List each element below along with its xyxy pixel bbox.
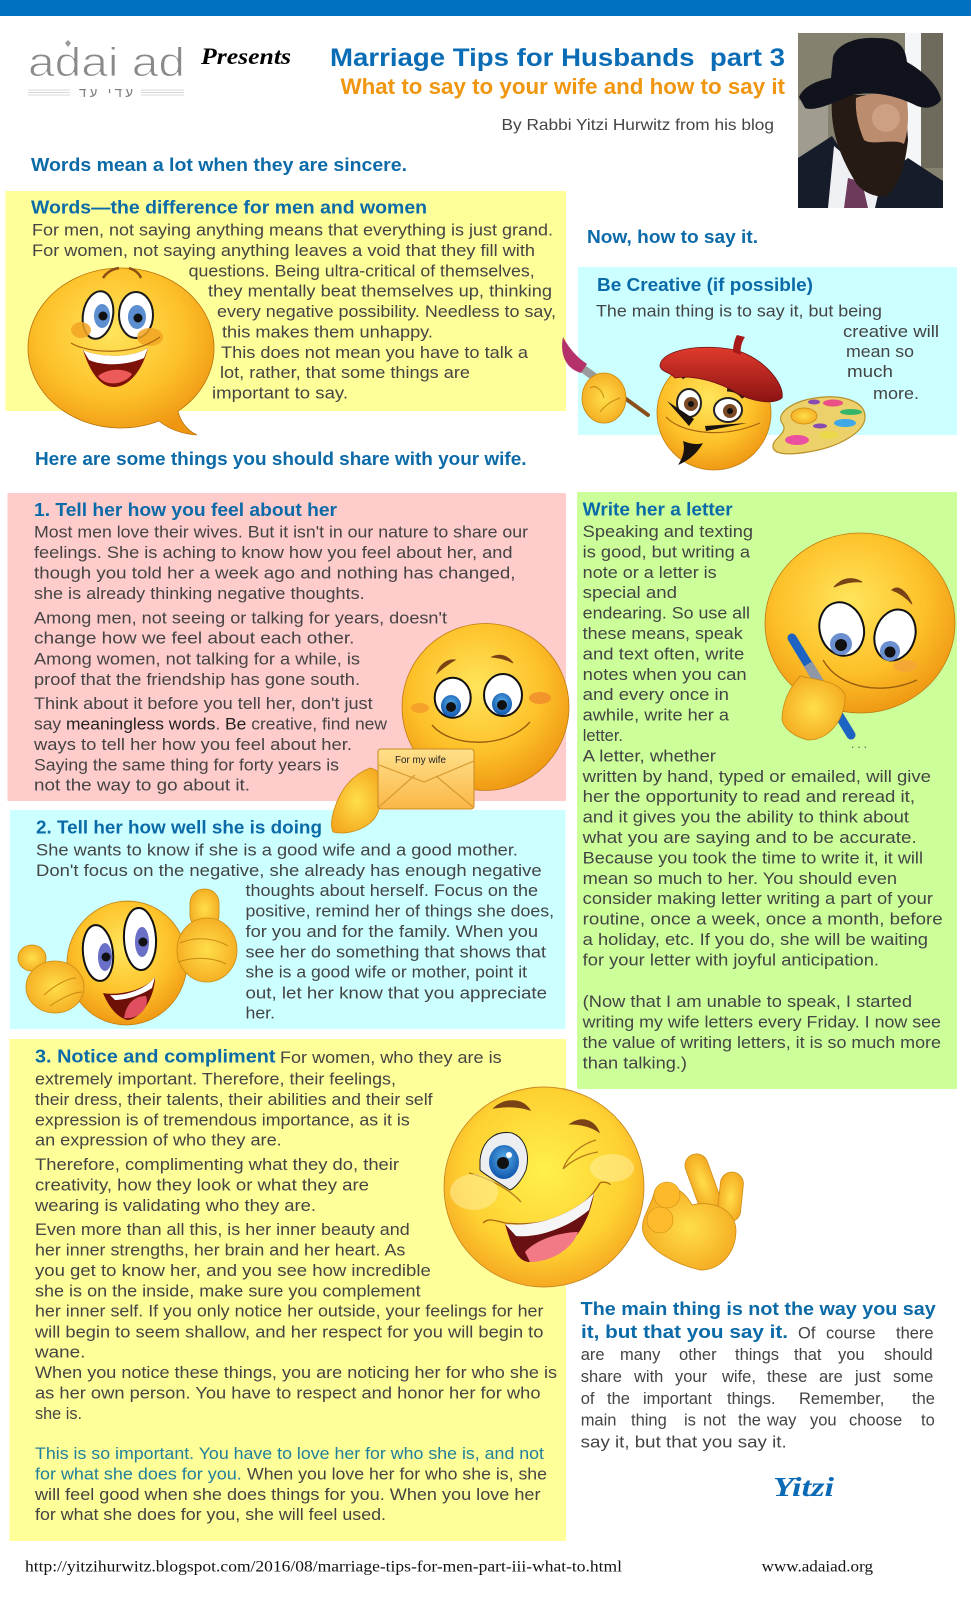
closing note: way: [766, 1412, 797, 1430]
closing note: it, but that you say it.: [581, 1322, 788, 1342]
panel text: Saying the same thing for forty years is: [34, 756, 339, 774]
logo: adai ad: adai ad: [28, 39, 185, 85]
panel text: than talking.): [583, 1054, 687, 1072]
closing note: is: [684, 1412, 696, 1430]
envelope: For my wife: For my wife: [395, 755, 446, 766]
panel text: thoughts about herself. Focus on the: [246, 882, 538, 900]
closing note: to: [921, 1412, 935, 1430]
closing note: not: [703, 1412, 726, 1430]
panel text: When you love her for who she is, she: [247, 1465, 547, 1483]
panel text: (Now that I am unable to speak, I started: [583, 993, 912, 1011]
panel text: every negative possibility. Needless to say,: [217, 303, 556, 321]
closing note: many: [620, 1346, 661, 1364]
panel text: positive, remind her of things she does,: [246, 903, 554, 921]
panel text: For women, not saying anything leaves a void that they fill with: [32, 242, 535, 260]
closing note: wife,: [721, 1368, 756, 1386]
panel: tell her how you feel: [8, 493, 566, 801]
panel text: as her own person. You have to respect and honor her for who: [35, 1384, 540, 1402]
panel heading: 1. Tell her how you feel about her: [34, 500, 337, 520]
closing note: things.: [727, 1390, 776, 1408]
panel text: special and: [583, 584, 677, 602]
icon: writing smiley with pen: [765, 533, 955, 751]
panel: be creative: [578, 267, 957, 435]
panel text: mean so: [846, 343, 914, 361]
heading: things to share: Here are some things you should share with your wife.: [35, 449, 526, 469]
closing note: important: [643, 1390, 712, 1408]
closing note: these: [767, 1368, 807, 1386]
signature: Yitzi: Yitzi: [773, 1472, 835, 1502]
panel heading: Words—the difference for men and women: [31, 198, 427, 218]
beret: [660, 347, 782, 402]
panel text: For men, not saying anything means that everything is just grand.: [32, 222, 553, 240]
panel heading: 2. Tell her how well she is doing: [36, 817, 322, 837]
panel: write her a letter: [577, 492, 957, 1089]
panel text: wearing is validating who they are.: [34, 1197, 316, 1215]
panel text: extremely important. Therefore, their feelings,: [35, 1070, 396, 1088]
panel text: and it gives you the ability to think about: [583, 809, 909, 827]
panel text: A letter, whether: [583, 747, 717, 765]
panel text: say meaningless words . Be creative, find new: [34, 715, 387, 733]
panel text: Most men love their wives. But it isn't in our nature to share our: [34, 524, 529, 542]
closing note: should: [884, 1346, 933, 1364]
panel text: creative will: [843, 323, 939, 341]
closing note: The main thing is not the way you say: [581, 1299, 936, 1319]
heading: words mean: Words mean a lot when they are sincere.: [31, 155, 407, 175]
right hand: [177, 889, 237, 982]
icon: writing smiley with pen: ...: [851, 737, 870, 751]
closing note: the: [912, 1390, 935, 1408]
closing note: things: [735, 1346, 779, 1364]
panel text: This does not mean you have to talk a: [221, 344, 529, 362]
panel text: lot, rather, that some things are: [220, 364, 470, 382]
palette: [773, 397, 865, 454]
panel text: and text often, write: [583, 645, 744, 663]
panel text: for your letter with joyful anticipation.: [583, 951, 879, 969]
icon: smiley holding letter: [331, 624, 569, 833]
closing note: some: [893, 1368, 933, 1386]
panel heading: Be Creative (if possible): [597, 275, 813, 295]
panel text: her the opportunity to read and reread it,: [583, 788, 915, 806]
panel text: more.: [873, 385, 919, 403]
left hand: [18, 945, 84, 1013]
top bar: [0, 0, 971, 16]
panel text: wane.: [34, 1344, 85, 1362]
panel text: writing my wife letters every Friday. I now see: [582, 1014, 941, 1032]
panel text: though you told her a week ago and nothing has changed,: [34, 564, 516, 582]
closing note: share: [581, 1368, 622, 1386]
panel text: Think about it before you tell her, don't just: [34, 695, 373, 713]
panel text: out, let her know that you appreciate: [246, 984, 547, 1002]
panel text: change how we feel about each other.: [34, 630, 354, 648]
closing note: say it, but that you say it.: [581, 1434, 787, 1452]
panel text: routine, once a week, once a month, before: [583, 911, 943, 929]
footer website: www.adaiad.org: [762, 1559, 873, 1576]
panel text: For women, who they are is: [280, 1049, 502, 1067]
title: Marriage Tips for Husbands part 3: [330, 44, 785, 72]
icon: thumbs up smiley: [18, 889, 237, 1036]
panel text: letter.: [583, 727, 623, 745]
closing note: are: [581, 1346, 605, 1364]
closing note: Of: [798, 1324, 816, 1342]
panel text: When you notice these things, you are noticing her for who she is: [35, 1364, 557, 1382]
panel text: ways to tell her how you feel about her.: [33, 736, 352, 754]
panel text: Therefore, complimenting what they do, their: [35, 1156, 400, 1174]
panel text: she is already thinking negative thoughts.: [34, 585, 365, 603]
panel text: she is a good wife or mother, point it: [246, 964, 527, 982]
closing note: of: [581, 1390, 595, 1408]
panel text: not the way to go about it.: [34, 777, 250, 795]
closing note: Remember,: [799, 1390, 884, 1408]
closing note: with: [633, 1368, 663, 1386]
panel text: The main thing is to say it, but being: [596, 303, 882, 321]
panel text: endearing. So use all: [583, 605, 750, 623]
panel heading: Write her a letter: [583, 500, 733, 520]
panel text: important to say.: [212, 384, 348, 402]
panel text: for what she does for you.: [35, 1465, 242, 1483]
panel text: written by hand, typed or emailed, will give: [582, 768, 931, 786]
panel: tell her how well she is doing: [10, 810, 566, 1029]
panel text: she is.: [35, 1405, 82, 1423]
panel text: feelings. She is aching to know how you feel about her, and: [34, 544, 512, 562]
subtitle: What to say to your wife and how to say it: [340, 74, 786, 99]
panel text: Speaking and texting: [583, 523, 753, 541]
panel text: awhile, write her a: [583, 707, 730, 725]
panel heading: 3. Notice and compliment: [35, 1047, 276, 1067]
closing note: other: [679, 1346, 717, 1364]
panel text: Even more than all this, is her inner beauty and: [35, 1221, 410, 1239]
panel text: their dress, their talents, their abilities and their self: [35, 1091, 433, 1109]
panel text: these means, speak: [583, 625, 744, 643]
byline: By Rabbi Yitzi Hurwitz from his blog: [502, 117, 774, 134]
closing note: you: [838, 1346, 865, 1364]
panel text: is good, but writing a: [583, 543, 751, 561]
panel text: Don't focus on the negative, she already has enough negative: [36, 862, 542, 880]
script heading: Presents: Presents: [200, 44, 291, 69]
panel text: [33, 524, 529, 795]
heading: now how to say it: Now, how to say it.: [587, 227, 758, 247]
envelope: For my wife: [378, 749, 474, 809]
logo: adai ad: [28, 39, 185, 100]
panel text: they mentally beat themselves up, thinking: [208, 283, 552, 301]
panel text: this makes them unhappy.: [222, 324, 433, 342]
closing note: [581, 1299, 936, 1452]
panel text: an expression of who they are.: [35, 1132, 282, 1150]
closing note: are: [819, 1368, 843, 1386]
closing note: the: [738, 1412, 761, 1430]
panel text: and every once in: [583, 686, 729, 704]
closing note: your: [675, 1368, 708, 1386]
panel text: [32, 222, 556, 402]
closing note: just: [854, 1368, 881, 1386]
panel text: note or a letter is: [583, 564, 717, 582]
artist face: [657, 356, 771, 470]
panel text: she is on the inside, make sure you complement: [35, 1283, 421, 1301]
closing note: thing: [631, 1412, 667, 1430]
photo: Rabbi Yitzi Hurwitz: [798, 33, 943, 208]
panel text: notes when you can: [583, 666, 747, 684]
panel text: see her do something that shows that: [246, 943, 546, 961]
panel text: will feel good when she does things for you. When you love her: [34, 1486, 541, 1504]
panel text: you get to know her, and you see how incredible: [35, 1262, 431, 1280]
panel text: the value of writing letters, it is so much more: [583, 1034, 941, 1052]
closing note: main: [581, 1412, 616, 1430]
icon: winking smiley with OK hand: [444, 1087, 745, 1287]
panel text: her.: [246, 1005, 275, 1023]
footer url: http://yitzihurwitz.blogspot.com/2016/08/marriage-tips-for-men-part-iii-what-to.html: [25, 1559, 623, 1576]
icon: speech bubble smiley: [28, 268, 214, 435]
panel text: much: [847, 363, 893, 381]
closing note: choose: [849, 1412, 902, 1430]
panel text: what you are saying and to be accurate.: [582, 829, 917, 847]
icon: artist smiley with beret, brush and palette: [562, 335, 865, 470]
closing note: that: [794, 1346, 822, 1364]
closing note: course: [826, 1324, 876, 1342]
OK hand: [642, 1151, 745, 1270]
logo: adai ad: עדי עד: [79, 85, 133, 100]
closing note: there: [896, 1324, 934, 1342]
panel text: Among women, not talking for a while, is: [34, 650, 360, 668]
panel text: She wants to know if she is a good wife and a good mother.: [36, 842, 518, 860]
panel text: will begin to seem shallow, and her respect for you will begin to: [34, 1323, 543, 1341]
panel text: [582, 523, 943, 1072]
panel text: questions. Being ultra-critical of themselves,: [189, 262, 535, 280]
panel text: This is so important. You have to love her for who she is, and not: [35, 1445, 544, 1463]
panel text: [596, 303, 939, 403]
closing note: the: [607, 1390, 630, 1408]
panel text: creativity, how they look or what they are: [35, 1176, 369, 1194]
panel text: a holiday, etc. If you do, she will be waiting: [583, 931, 928, 949]
panel: notice and compliment: [10, 1039, 566, 1541]
closing note: you: [810, 1412, 837, 1430]
panel text: her inner self. If you only notice her outside, your feelings for her: [35, 1303, 544, 1321]
panel text: for what she does for you, she will feel used.: [35, 1506, 386, 1524]
panel text: consider making letter writing a part of your: [583, 890, 934, 908]
panel text: her inner strengths, her brain and her heart. As: [35, 1242, 405, 1260]
panel text: [34, 1049, 557, 1524]
panel text: Because you took the time to write it, it will: [583, 849, 923, 867]
panel text: proof that the friendship has gone south.: [34, 671, 360, 689]
panel text: [36, 842, 554, 1023]
panel text: for you and for the family. When you: [246, 923, 538, 941]
panel text: mean so much to her. You should even: [583, 870, 897, 888]
panel text: expression is of tremendous importance, as it is: [35, 1111, 410, 1129]
panel: words difference: [6, 191, 566, 411]
icon: paint brush: [562, 337, 648, 423]
panel text: Among men, not seeing or talking for years, doesn't: [34, 609, 447, 627]
hand: [331, 768, 383, 833]
